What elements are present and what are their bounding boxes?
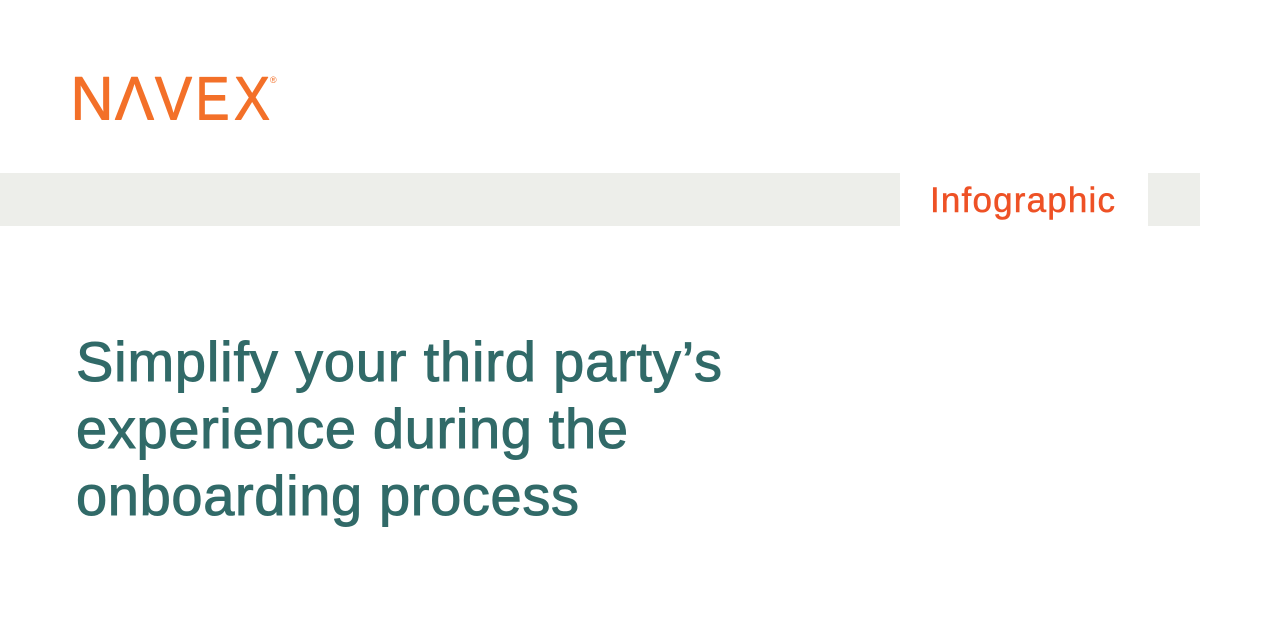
header band: right segment [1148,173,1200,226]
title [76,330,722,527]
logo: NAVEX: E [196,64,230,132]
logo: NAVEX: N [70,64,114,132]
logo: NAVEX [70,64,277,132]
label: Infographic: Infographic [930,181,1115,220]
title: experience during the [76,397,628,460]
title: Simplify your third party’s [76,330,722,393]
title: onboarding process [76,464,579,527]
logo: NAVEX: X [234,64,270,132]
logo: NAVEX: Λ [115,64,154,132]
logo: NAVEX: ® [270,75,277,85]
header band: left segment [0,173,900,226]
logo: NAVEX: V [155,64,192,132]
